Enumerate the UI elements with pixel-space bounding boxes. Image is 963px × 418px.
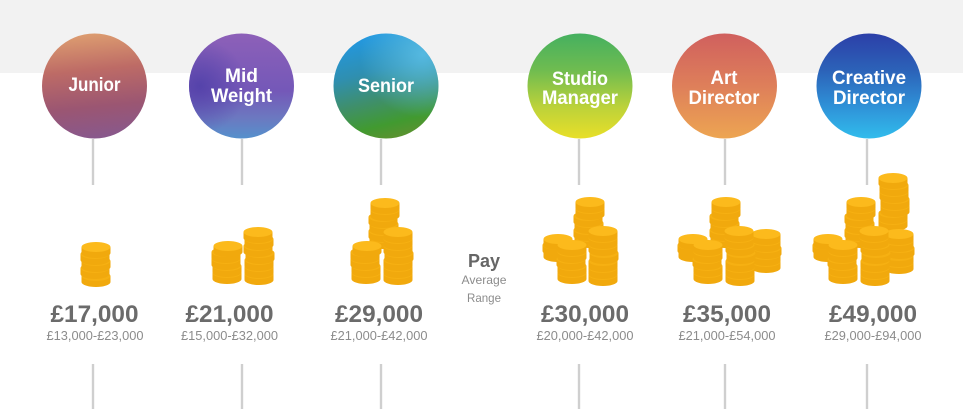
badge: Senior — [334, 34, 438, 138]
average pay: Junior: £17,000 — [50, 301, 138, 328]
coins: Junior — [80, 242, 110, 287]
connector lines: Mid Weight — [241, 139, 243, 409]
badge: Junior: Junior — [68, 75, 121, 96]
badge: Art Director: Art — [710, 68, 738, 89]
connector lines: Senior — [380, 139, 382, 409]
pay range: Studio Manager: £20,000-£42,000 — [536, 328, 634, 343]
average pay: Art Director: £35,000 — [683, 301, 771, 328]
column: Mid Weight — [181, 34, 294, 409]
connector lines: Creative Director — [866, 139, 868, 409]
average pay: Creative Director: £49,000 — [829, 301, 917, 328]
badge: Mid Weight — [189, 34, 294, 138]
pay range: Mid Weight: £15,000-£32,000 — [181, 328, 278, 343]
average pay: Mid Weight: £21,000 — [186, 301, 274, 328]
legend: pay / average / range: Pay — [468, 251, 500, 271]
badge: Studio Manager: Manager — [542, 88, 619, 109]
badge: Creative Director: Director — [833, 88, 906, 109]
coins: Creative Director — [812, 173, 914, 286]
pay range: Art Director: £21,000-£54,000 — [678, 328, 776, 343]
badge: Mid Weight: Weight — [211, 86, 273, 107]
badge: Art Director — [672, 34, 777, 138]
pay range: Junior: £13,000-£23,000 — [46, 328, 144, 343]
badge: Junior — [42, 34, 147, 138]
average pay: Studio Manager: £30,000 — [541, 301, 629, 328]
average pay: Senior: £29,000 — [335, 301, 423, 328]
badge: Creative Director — [816, 34, 922, 138]
coins: Studio Manager — [542, 197, 618, 286]
connector lines: Studio Manager — [578, 139, 580, 409]
badge: Creative Director: Creative — [832, 68, 906, 89]
badge: Mid Weight: Mid — [225, 66, 258, 87]
badge: Studio Manager — [528, 34, 632, 138]
coins: Senior — [350, 198, 414, 285]
column: Art Director — [672, 34, 782, 409]
connector lines: Art Director — [724, 139, 726, 409]
column: Creative Director — [812, 34, 922, 409]
badge: Studio Manager: Studio — [552, 69, 608, 90]
badge: Senior: Senior — [358, 76, 415, 97]
column: Junior — [42, 34, 147, 409]
legend: pay / average / range — [462, 251, 507, 305]
column: Studio Manager — [528, 34, 634, 409]
pay range: Senior: £21,000-£42,000 — [330, 328, 428, 343]
connector lines: Junior — [92, 139, 94, 409]
coins: Mid Weight — [212, 227, 274, 285]
pay range: Creative Director: £29,000-£94,000 — [824, 328, 922, 343]
badge: Art Director: Director — [688, 88, 760, 109]
legend: pay / average / range: Range — [467, 291, 501, 305]
legend: pay / average / range: Average — [462, 273, 507, 287]
top grey band — [0, 0, 963, 73]
column: Senior — [330, 34, 438, 409]
coins: Art Director — [678, 197, 782, 286]
